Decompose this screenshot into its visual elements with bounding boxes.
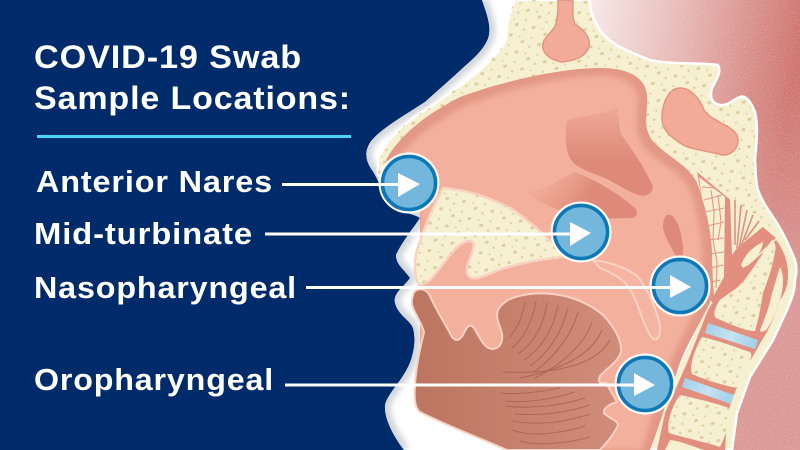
label: mid-turbinate — [34, 202, 610, 262]
nerve fan — [730, 198, 764, 255]
olfactory lattice — [699, 177, 725, 295]
divider — [37, 135, 351, 138]
soft palate and uvula — [593, 260, 660, 339]
panel: airway soft tissue — [386, 68, 713, 450]
posterior process — [760, 267, 783, 332]
vertebra texture — [668, 240, 776, 447]
tongue muscle fibres — [500, 302, 610, 444]
vertebrae — [665, 240, 783, 450]
cervical bone 1 — [714, 240, 776, 331]
label: mid-turbinate: Mid-turbinate — [34, 217, 253, 251]
nerve plexus — [697, 172, 776, 308]
panel: head background tissue — [575, 0, 800, 450]
label: anterior nares: Anterior Nares — [36, 165, 273, 199]
hard palate bone — [415, 188, 570, 285]
cervical bone 4 — [665, 440, 704, 450]
turbinate lower — [525, 172, 637, 218]
label: anterior nares — [36, 154, 438, 212]
lattice cells — [702, 187, 724, 288]
intervertebral discs — [682, 323, 758, 404]
label: nasopharyngeal: Nasopharyngeal — [34, 271, 297, 305]
label: oropharyngeal — [34, 354, 674, 414]
title line two: Sample Locations: — [34, 80, 351, 116]
label: nasopharyngeal — [34, 256, 710, 316]
neck spine tissue — [657, 240, 788, 450]
title: COVID-19 Swab — [34, 39, 302, 75]
turbinate upper — [566, 108, 653, 196]
nerve leaf — [741, 242, 763, 268]
face skin silhouette — [366, 0, 514, 450]
eustachian shadow — [663, 215, 683, 262]
bone texture — [378, 0, 775, 260]
cervical bone 3 — [668, 395, 729, 447]
cervical bone 2 — [691, 337, 751, 388]
fan lines — [735, 200, 759, 248]
bone: skull base and neck cream — [378, 0, 796, 450]
sphenoid sinus upper — [543, 0, 589, 62]
sphenoid sinus rear — [662, 88, 738, 155]
label: oropharyngeal: Oropharyngeal — [34, 363, 274, 397]
tongue and jaw — [412, 289, 621, 450]
